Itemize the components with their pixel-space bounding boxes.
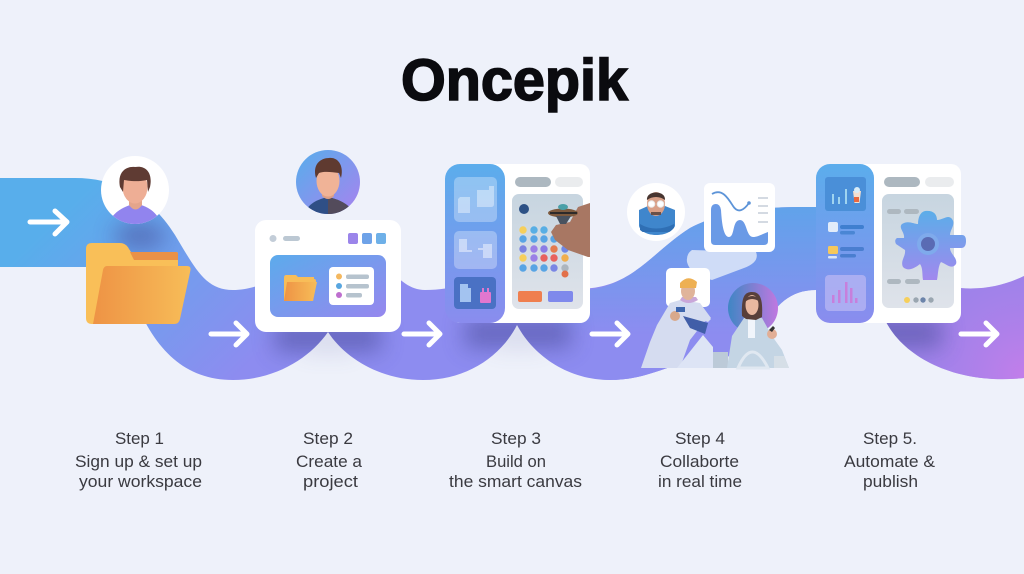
icon: gear [895, 211, 966, 280]
window controls [270, 233, 386, 244]
step 1 caption: your workspace [79, 473, 202, 491]
top pills [884, 177, 954, 187]
icon: hand with stylus [548, 203, 590, 257]
panel: step 2 project window [255, 220, 401, 332]
soft shadows on background [300, 320, 546, 355]
light blue blob under chart [687, 250, 757, 280]
canvas top pills [515, 177, 583, 187]
step 3 caption: Step 3 [491, 430, 541, 448]
figure: colleague with box [641, 268, 728, 368]
icon: yellow folder [86, 243, 191, 324]
step 4 caption: in real time [658, 473, 742, 491]
avatar: step 4 person with glasses [627, 183, 685, 241]
chart trend line [712, 192, 749, 210]
chart legend lines [758, 198, 768, 222]
canvas sidebar [445, 164, 505, 323]
arrow 1 [30, 211, 67, 234]
step 2 caption [296, 430, 363, 491]
automation canvas [882, 194, 954, 308]
project preview [270, 255, 386, 317]
step 2 caption: Step 2 [303, 430, 353, 448]
arrow 3 [404, 323, 440, 345]
panel: step 3 smart canvas [445, 164, 590, 323]
step 1 caption: Sign up & set up [75, 453, 202, 471]
step 3 caption: Build on [486, 453, 546, 471]
title: Oncepik [401, 48, 629, 113]
arrow 4 [592, 323, 628, 345]
step 4 caption: Step 4 [675, 430, 725, 448]
step 5 caption: publish [863, 473, 918, 491]
arrow 5 [961, 323, 997, 345]
step 1 caption: Step 1 [115, 430, 164, 448]
step 5 caption: Automate & [844, 453, 935, 471]
step 4 caption [658, 430, 742, 491]
card shadows on ribbon [114, 222, 942, 352]
automation sidebar [816, 164, 874, 323]
step 3 caption [449, 430, 582, 491]
step 5 caption: Step 5. [863, 430, 917, 448]
step 1 caption [75, 430, 202, 491]
step 4 caption: Collaborte [660, 453, 739, 471]
figure: colleague with halo [727, 283, 789, 368]
arrow 2 [211, 323, 247, 345]
step 5 caption [844, 430, 935, 491]
avatar: step 2 person [296, 150, 360, 216]
avatar: step 1 person [101, 156, 169, 224]
canvas colour grid [512, 194, 583, 309]
step 2 caption: project [303, 473, 358, 491]
panel: step 5 automate and publish [816, 164, 966, 323]
step 3 caption: the smart canvas [449, 473, 582, 491]
step 2 caption: Create a [296, 453, 363, 471]
flowing ribbon [0, 178, 1024, 380]
panel: step 4 wave chart card [704, 183, 775, 252]
